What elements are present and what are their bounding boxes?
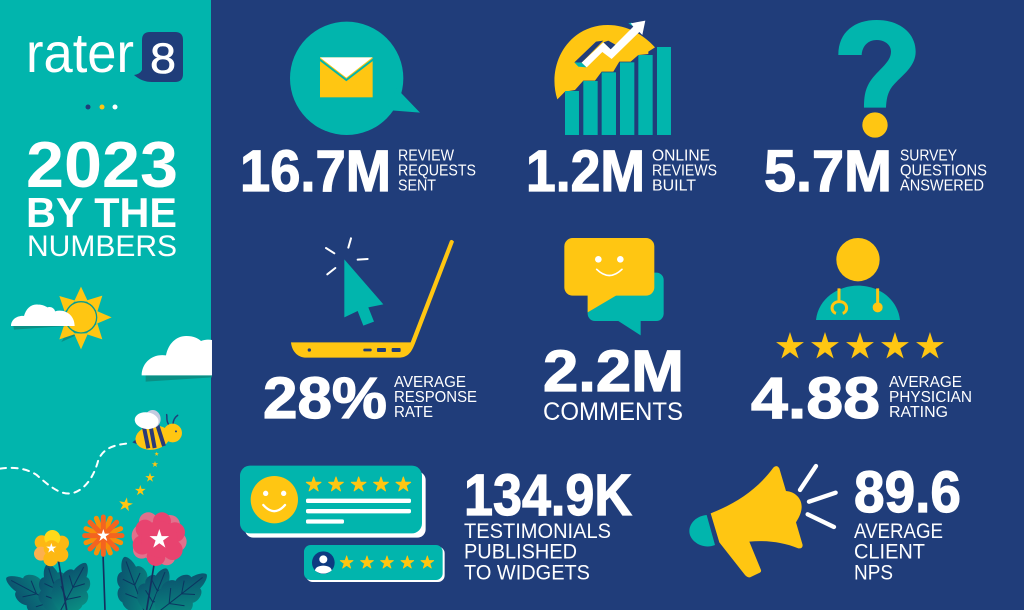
illustration: sky, bee and flowers	[0, 287, 218, 610]
stat: review requests	[240, 139, 476, 204]
leaves	[0, 550, 218, 610]
stat: testimonials: TESTIMONIALS	[464, 519, 611, 543]
stat: client NPS: AVERAGE	[854, 519, 943, 543]
icon: pink flower	[132, 512, 187, 566]
logo: rater8: rater	[26, 21, 134, 84]
stat: comments: 2.2M	[543, 339, 684, 404]
icon: envelope speech bubble	[290, 22, 420, 135]
stat: survey questions	[764, 139, 987, 204]
icon: small cloud	[11, 304, 75, 330]
stat: comments: COMMENTS	[543, 398, 683, 426]
stat: physician rating: AVERAGE	[889, 374, 962, 391]
icon: comment bubbles	[564, 238, 664, 335]
stat: client NPS: NPS	[854, 560, 893, 584]
star trail	[118, 452, 159, 512]
icon: testimonial cards	[240, 466, 445, 582]
icon: question mark	[838, 20, 916, 138]
stat: response rate: AVERAGE	[394, 374, 466, 391]
icon: large cloud	[142, 336, 212, 382]
title	[26, 128, 178, 263]
title: BY THE	[26, 189, 177, 236]
stat: online reviews	[526, 139, 717, 204]
icon: laptop with cursor	[291, 238, 454, 358]
stat: response rate	[263, 366, 477, 431]
stat: online reviews: 1.2M	[526, 139, 645, 204]
stat: testimonials: PUBLISHED	[464, 540, 577, 564]
logo: rater8: 8	[150, 35, 176, 83]
icon: orange flower	[85, 517, 122, 554]
icon: physician with stars	[776, 238, 944, 359]
stat: review requests: REVIEW	[398, 148, 455, 164]
stat: comments	[543, 339, 684, 426]
stat: testimonials: TO WIDGETS	[464, 560, 590, 584]
icon: bee	[132, 410, 182, 452]
stat: online reviews: REVIEWS	[652, 162, 717, 180]
icon: megaphone	[689, 466, 836, 577]
stat: response rate: RATE	[394, 404, 433, 421]
stat: testimonials: 134.9K	[464, 463, 632, 528]
stat: survey questions: QUESTIONS	[900, 162, 987, 180]
stat: online reviews: ONLINE	[652, 148, 710, 164]
stat: client NPS: CLIENT	[854, 540, 925, 564]
panel: left sidebar	[0, 0, 218, 610]
stat: physician rating: 4.88	[751, 366, 880, 431]
stat: review requests: SENT	[398, 178, 436, 194]
stat: survey questions: SURVEY	[900, 148, 957, 164]
stat: physician rating	[751, 366, 972, 431]
stat: response rate: 28%	[263, 366, 387, 431]
title: NUMBERS	[27, 230, 177, 263]
stat: physician rating: RATING	[889, 404, 948, 421]
stat: response rate: RESPONSE	[394, 389, 477, 406]
stat: client NPS	[854, 460, 961, 584]
stat: online reviews: BUILT	[652, 178, 696, 194]
stat: review requests: REQUESTS	[398, 162, 476, 180]
stat: testimonials	[464, 463, 632, 584]
icon: rising bar chart	[554, 21, 671, 135]
flight path	[0, 443, 128, 494]
stat: client NPS: 89.6	[854, 460, 961, 525]
icon: yellow flower	[34, 530, 69, 566]
stat: review requests: 16.7M	[240, 139, 391, 204]
title: 2023	[26, 128, 178, 201]
stems	[58, 553, 154, 610]
three dots	[86, 104, 118, 110]
stat: physician rating: PHYSICIAN	[889, 389, 972, 406]
stat: survey questions: ANSWERED	[900, 178, 984, 194]
icon: sun	[59, 287, 112, 349]
stat: survey questions: 5.7M	[764, 139, 892, 204]
